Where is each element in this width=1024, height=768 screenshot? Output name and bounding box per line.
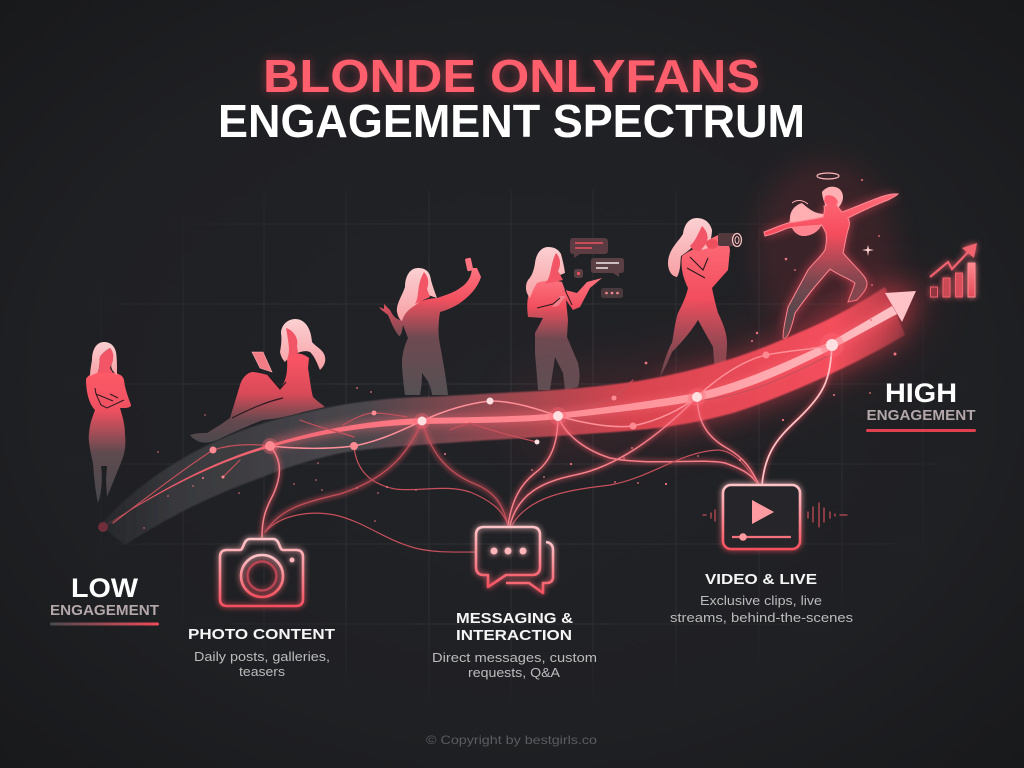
- icon: chat bubbles: [476, 527, 553, 593]
- label: high engagement: ENGAGEMENT: [866, 407, 976, 424]
- text block: video and live: [670, 571, 854, 625]
- glowing network connections: [113, 345, 832, 552]
- figure: selfie woman: [379, 258, 481, 395]
- text block: video and live: VIDEO & LIVE: [705, 571, 817, 588]
- network nodes: [210, 333, 844, 478]
- title: BLONDE ONLYFANS: [263, 50, 760, 102]
- label: low engagement: ENGAGEMENT: [50, 602, 159, 619]
- engagement spectrum ribbon arrow: [98, 285, 925, 545]
- label: low engagement: [50, 573, 159, 626]
- text block: video and live: streams, behind-the-scenes: [670, 610, 854, 625]
- icon: video player: [723, 485, 800, 549]
- figure: chatting woman with speech bubbles: [526, 238, 624, 390]
- title: BLONDE ONLYFANS: [263, 50, 760, 102]
- icon: growth bar chart with arrow: [930, 243, 977, 297]
- text block: video and live: Exclusive clips, live: [700, 593, 822, 608]
- text block: photo content: Daily posts, galleries,: [194, 649, 330, 664]
- figure: low engagement standing woman: [86, 342, 131, 503]
- text block: messaging and interaction: Direct messages, custom: [432, 650, 597, 665]
- icon: sound waves: [703, 503, 847, 527]
- icon: camera: [220, 539, 303, 606]
- copyright footer: © Copyright by bestgirls.co: [426, 733, 597, 747]
- label: high engagement: [866, 378, 976, 432]
- title: [218, 50, 805, 147]
- figure: dancing woman with halo: [755, 160, 898, 340]
- figure: photographer woman with camera: [660, 218, 742, 377]
- text block: messaging and interaction: requests, Q&A: [468, 665, 560, 680]
- sparkle particles: [143, 179, 897, 529]
- text block: photo content: [188, 626, 335, 679]
- text block: photo content: PHOTO CONTENT: [188, 626, 335, 643]
- title: ENGAGEMENT SPECTRUM: [218, 95, 805, 147]
- text block: messaging and interaction: [432, 610, 597, 680]
- label: high engagement: HIGH: [885, 378, 957, 408]
- text block: photo content: teasers: [239, 664, 286, 679]
- text block: messaging and interaction: MESSAGING &: [456, 610, 573, 627]
- label: low engagement: LOW: [71, 573, 139, 603]
- figure: sitting woman with tablet: [190, 319, 325, 443]
- text block: messaging and interaction: INTERACTION: [456, 627, 572, 644]
